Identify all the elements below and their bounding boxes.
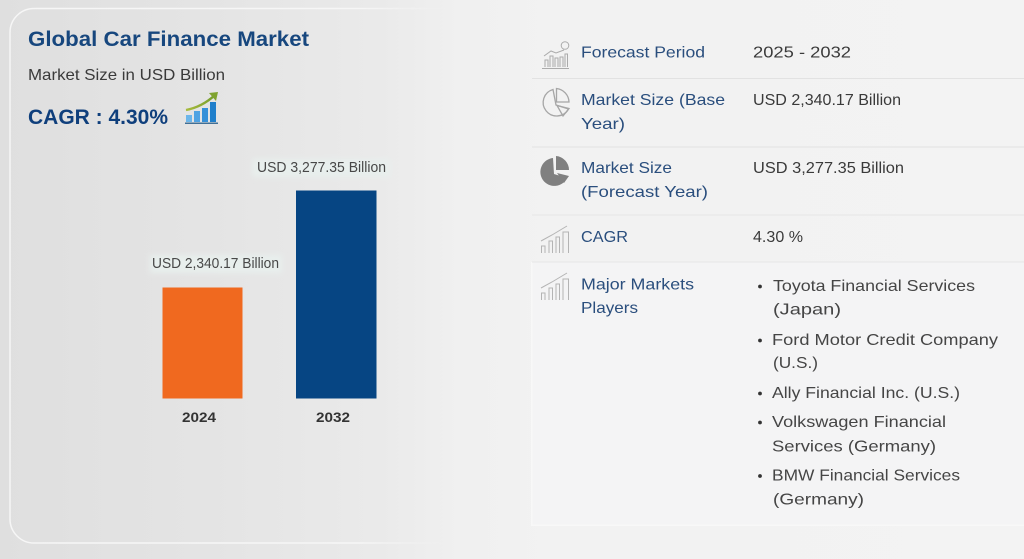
icon: solid pie <box>540 156 569 186</box>
list: company names: (Japan) <box>773 302 841 318</box>
panel: market size chart <box>10 8 450 543</box>
row: market size base year: USD 2,340.17 Billion <box>753 92 901 109</box>
axis label: 2032: 2032 <box>316 409 350 425</box>
row: major market players: Major Markets <box>581 276 694 294</box>
row: market size forecast year: (Forecast Year) <box>581 184 708 201</box>
row: market size base year: Market Size (Base <box>581 92 725 109</box>
panel: market details table <box>531 42 1024 526</box>
row: market size forecast year: USD 3,277.35 Billion <box>753 160 904 177</box>
axis label: 2024: 2024 <box>182 409 216 425</box>
icon: outline pie <box>543 88 569 116</box>
row: market size base year: Year) <box>581 116 625 133</box>
list: company names: Ford Motor Credit Company <box>772 332 998 349</box>
list: company names: Services (Germany) <box>772 438 936 456</box>
row: market size forecast year <box>540 156 904 201</box>
icon: growth chart <box>185 92 218 124</box>
list: company names: Toyota Financial Services <box>773 278 975 295</box>
icon: forecast chart <box>542 42 569 68</box>
row: forecast period: Forecast Period <box>581 44 705 62</box>
icon: growth bars <box>541 273 568 300</box>
row: CAGR: CAGR <box>581 229 628 246</box>
bar: 2032 <box>296 190 376 398</box>
title: Global Car Finance Market <box>28 27 309 51</box>
row: market size base year <box>543 88 901 133</box>
label: 2024 value: USD 2,340.17 Billion <box>152 256 279 272</box>
CAGR value: CAGR : 4.30% <box>28 105 168 129</box>
list: company names <box>758 278 998 508</box>
list: company names: Ally Financial Inc. (U.S.) <box>772 385 960 402</box>
bar: 2024 <box>162 288 242 398</box>
label: 2032 value: USD 3,277.35 Billion <box>257 160 386 176</box>
subtitle: Market Size in USD Billion <box>28 67 225 84</box>
icon: growth bars <box>541 226 568 253</box>
list: company names: Volkswagen Financial <box>772 414 946 431</box>
bar chart <box>150 159 390 425</box>
row: major market players <box>541 273 998 508</box>
row: forecast period: 2025 - 2032 <box>753 44 851 62</box>
list: company names: BMW Financial Services <box>772 468 960 484</box>
list: company names: (Germany) <box>773 492 864 508</box>
row: CAGR: 4.30 % <box>753 229 803 246</box>
row: CAGR <box>541 226 803 253</box>
row: forecast period <box>542 42 851 68</box>
row: market size forecast year: Market Size <box>581 160 672 177</box>
list: company names: (U.S.) <box>773 355 818 372</box>
row: major market players: Players <box>581 300 638 317</box>
